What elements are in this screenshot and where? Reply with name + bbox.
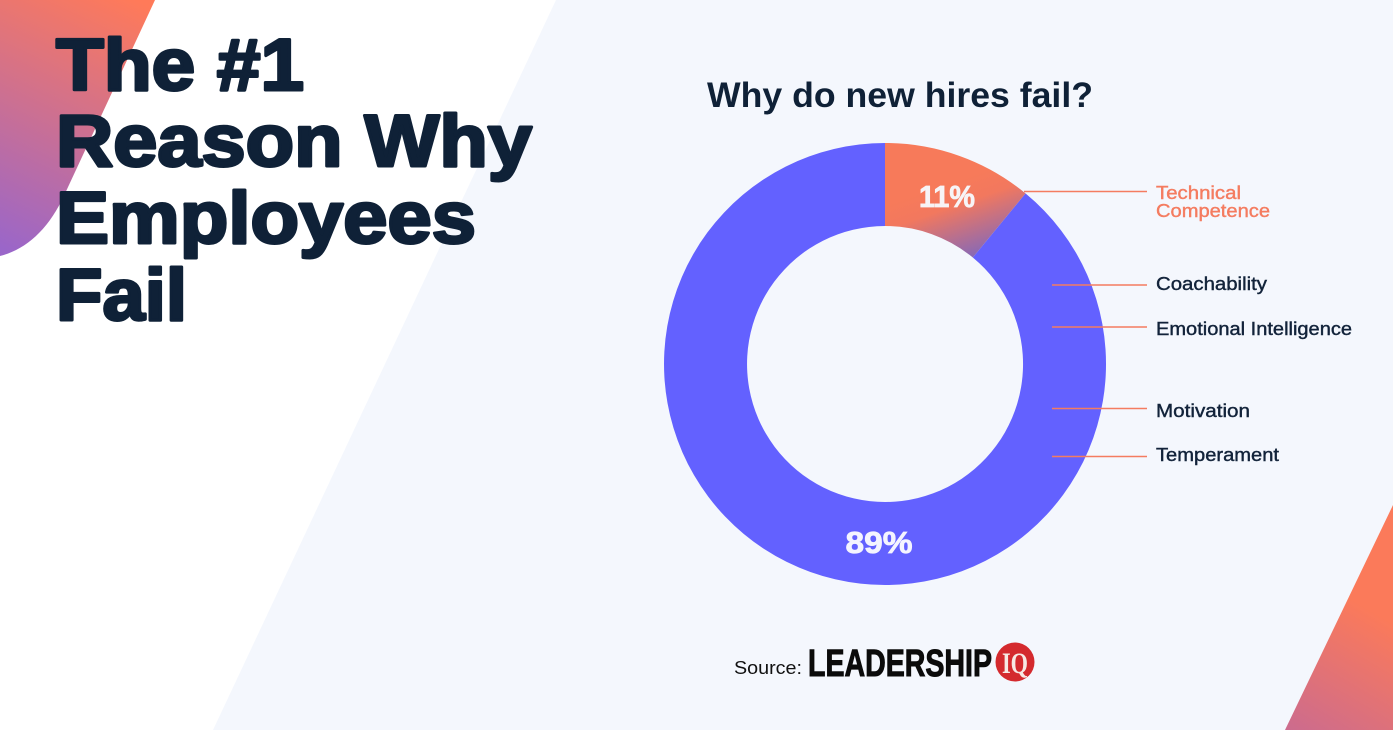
label: Technical Competence: Technical: [1156, 183, 1241, 203]
value: 89%: 89%: [846, 525, 912, 560]
source text: Source:: [734, 657, 802, 678]
label: Technical Competence: Competence: [1156, 201, 1270, 221]
logo badge text: IQ: [1002, 647, 1028, 680]
label: Temperament: Temperament: [1156, 445, 1279, 465]
title: Reason Why: [56, 101, 532, 182]
title: Fail: [56, 255, 187, 336]
title: Employees: [56, 178, 476, 259]
label: Coachability: Coachability: [1156, 274, 1267, 294]
segment: 89%: [664, 143, 1106, 585]
label: Motivation: Motivation: [1156, 401, 1250, 421]
value: 11%: 11%: [919, 179, 975, 214]
decorative gradient corner bottom right: [1285, 505, 1393, 730]
donut chart: [664, 143, 1106, 585]
title: The #1: [56, 25, 304, 106]
decorative gradient blob top left: [0, 0, 155, 256]
label: Emotional Intelligence: Emotional Intelligence: [1156, 319, 1352, 339]
chart heading: Why do new hires fail?: [707, 76, 1093, 115]
logo wordmark: LEADERSHIP: [808, 643, 992, 685]
logo: Leadership IQ: [808, 642, 1034, 685]
label: Technical Competence: [1024, 183, 1270, 221]
title: [56, 25, 532, 336]
segment: 11%: [885, 143, 1026, 258]
logo badge: [996, 642, 1034, 682]
